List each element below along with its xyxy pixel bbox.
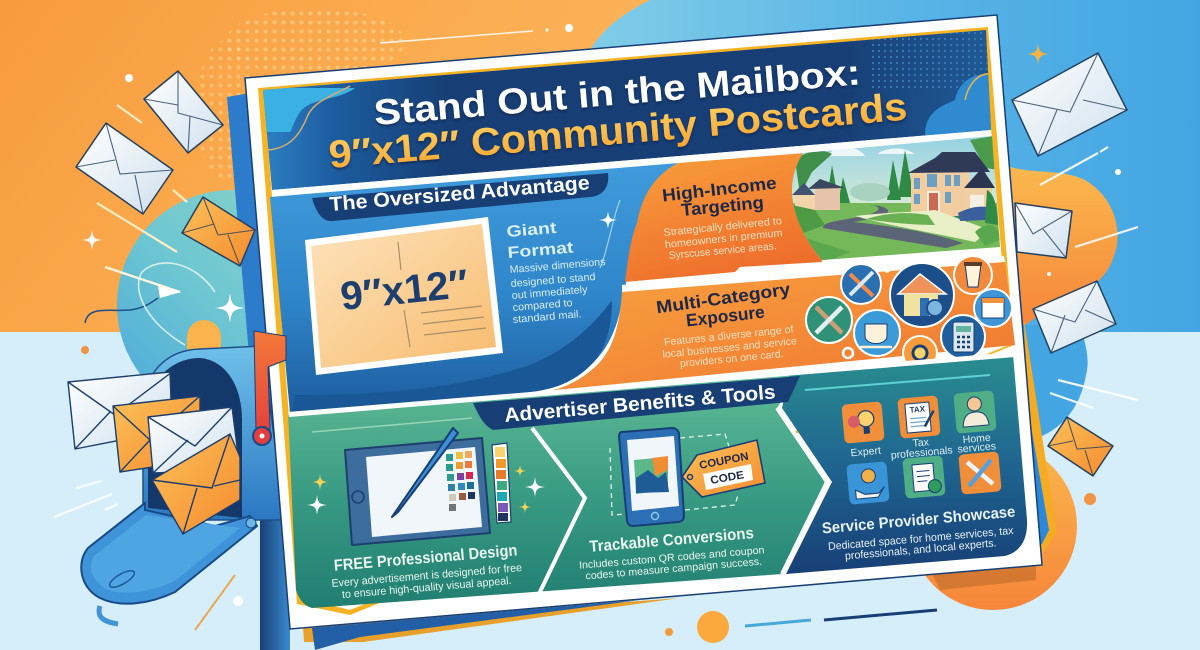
icon: sparkles <box>82 230 245 323</box>
category text: Exposure <box>685 302 766 330</box>
postcard illustration: 9″x12″ <box>338 262 470 319</box>
design text: FREE Professional Design <box>333 542 518 575</box>
icon: phone with coupon: CODE <box>709 469 745 487</box>
envelope: left <box>76 123 173 214</box>
icon: coffee cup <box>954 256 992 294</box>
category text: Features a diverse range of <box>663 323 794 349</box>
icon: phone with coupon: COUPON <box>698 451 750 472</box>
postcard card <box>245 15 1042 629</box>
section heading badge: The Oversized Advantage <box>329 172 591 216</box>
icon: tax <box>897 395 941 439</box>
envelope: top right large <box>1012 53 1127 156</box>
trackable panel <box>288 372 827 608</box>
icon grid: service providers: services <box>957 440 996 456</box>
blob: lower orange circle <box>909 442 1077 610</box>
panel: multi-category exposure <box>535 256 1015 392</box>
panel: advertiser benefits <box>288 352 1027 608</box>
card sheet <box>245 15 1042 629</box>
design text <box>331 542 522 601</box>
title: 9″x12″ Community Postcards <box>327 86 909 177</box>
icon: hand <box>846 461 890 505</box>
icon grid: service providers <box>841 390 1002 505</box>
targeting text: Targeting <box>680 192 765 220</box>
giant format text: Giant <box>506 220 558 241</box>
icon: calculator <box>941 315 985 359</box>
targeting text: Syrscuse service areas. <box>668 240 777 262</box>
category text: providers on one card. <box>679 348 784 370</box>
icon: design tablet <box>307 428 545 545</box>
envelope: right orange <box>1048 417 1113 476</box>
mailbox envelopes <box>68 372 240 534</box>
giant format text: standard mail. <box>512 308 582 326</box>
title <box>327 51 909 177</box>
scattered envelopes <box>76 53 1127 476</box>
panel: high-income targeting <box>622 130 1005 292</box>
house scene <box>792 136 1000 260</box>
mailbox door <box>81 503 257 604</box>
trackable text: codes to measure campaign success. <box>585 556 762 582</box>
stacked sheets behind card <box>227 93 1057 650</box>
icon: coffee <box>854 310 900 356</box>
icon: tools <box>841 264 881 304</box>
icon grid: service providers: professionals <box>890 444 953 462</box>
design text: to ensure high-quality visual appeal. <box>342 575 512 601</box>
icon grid: service providers: Expert <box>850 445 881 459</box>
icon: gear <box>903 336 937 370</box>
giant format text: Massive dimensions <box>509 256 606 276</box>
icon: calendar <box>974 289 1012 327</box>
title: Stand Out in the Mailbox: <box>372 51 862 133</box>
envelope: right lower <box>1033 281 1116 353</box>
category text <box>655 279 798 370</box>
decorative marks lower <box>54 346 937 643</box>
targeting text: Strategically delivered to <box>663 215 783 239</box>
showcase text <box>821 504 1016 563</box>
icon: home services <box>953 390 997 434</box>
trackable text: Trackable Conversions <box>589 525 755 556</box>
targeting text: High-Income <box>661 173 778 205</box>
section heading badge: Advertiser Benefits & Tools <box>504 381 776 427</box>
mailbox <box>68 346 290 650</box>
giant format text: Format <box>507 239 575 262</box>
right blobs <box>909 43 1138 610</box>
mailbox post <box>260 520 290 650</box>
postcard illustration <box>305 217 503 375</box>
showcase text: Dedicated space for home services, tax <box>828 525 1014 553</box>
panel: header band <box>263 25 995 197</box>
targeting text: homeowners in premium <box>664 227 783 251</box>
design text: Every advertisement is designed for free <box>331 562 522 590</box>
category text: Multi-Category <box>655 279 792 317</box>
icon: expert <box>841 401 885 444</box>
envelope: left orange <box>182 197 255 266</box>
showcase text: professionals, and local experts. <box>845 537 997 563</box>
icon: tools <box>958 451 1002 495</box>
giant format text: designed to stand <box>510 271 596 290</box>
giant format text: out immediately <box>511 284 589 302</box>
icon grid: service providers: Tax <box>912 436 930 450</box>
left teal blob <box>82 74 347 420</box>
showcase text: Service Provider Showcase <box>821 504 1016 537</box>
icon grid: service providers: Home <box>962 432 991 446</box>
blob: right orange <box>1000 165 1118 325</box>
icon: tax: TAX <box>909 404 926 415</box>
panel: the oversized advantage <box>270 163 678 413</box>
envelope: top left <box>144 71 223 153</box>
icon: phone with coupon <box>610 428 765 526</box>
icon: checklist <box>902 455 946 499</box>
mailbox body <box>143 346 285 520</box>
icon: wrench <box>806 297 852 343</box>
trackable text: Includes custom QR codes and coupon <box>579 544 765 572</box>
decorative streaks <box>1040 147 1138 408</box>
icon: house and gear <box>890 263 954 327</box>
targeting text <box>661 173 783 262</box>
blob: right blue <box>1020 325 1088 436</box>
service provider panel <box>782 354 1027 574</box>
mailbox flag <box>253 331 286 445</box>
card border <box>258 27 1014 615</box>
section heading badge <box>473 376 800 430</box>
giant format text: compared to <box>512 297 573 314</box>
category text: local businesses and service <box>662 335 798 361</box>
giant format text <box>506 220 606 326</box>
trackable text <box>579 525 765 582</box>
envelope: right middle <box>1015 203 1072 258</box>
